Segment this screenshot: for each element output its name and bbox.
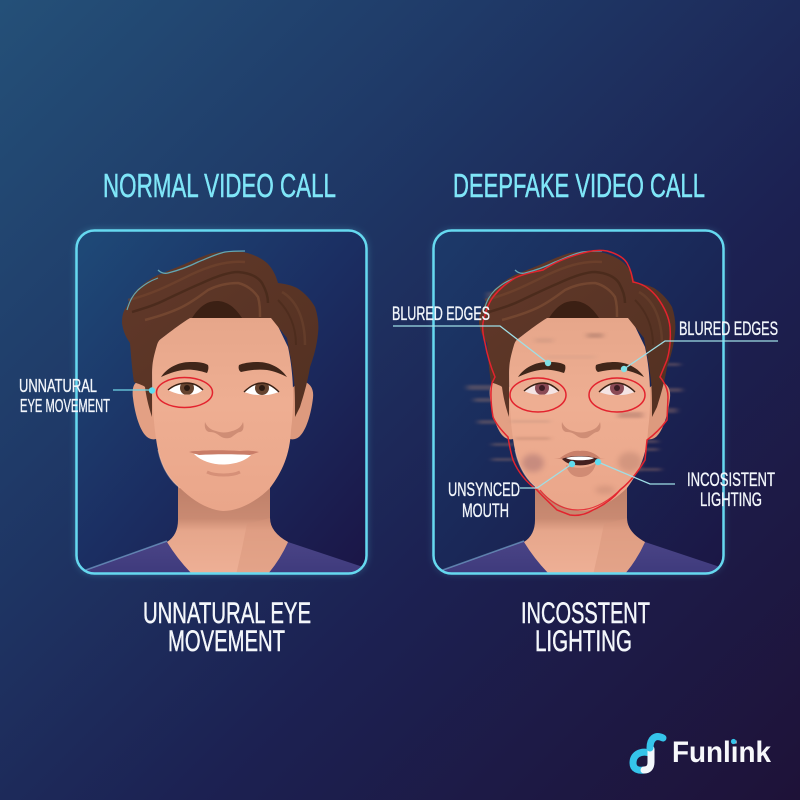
callout: unnatural eye movement: UNNATURAL [19, 376, 97, 396]
cheek and forehead glitch patches [510, 333, 643, 440]
caption: incosstent lighting [521, 597, 650, 658]
caption: unnatural eye movement [143, 597, 311, 658]
eye highlight: red ellipse [156, 378, 212, 408]
icon: cyan dot on i [731, 739, 736, 744]
callout: blured edges right [621, 319, 778, 372]
caption: incosstent lighting: LIGHTING [535, 625, 632, 658]
icon: Funlink mark [633, 737, 663, 770]
panel: normal video call [76, 230, 366, 575]
callout: inconsistent lighting [595, 459, 775, 511]
logo: Funlink [633, 736, 771, 770]
red face outline [483, 250, 670, 515]
blur ghost streaks [467, 292, 682, 471]
panel: deepfake video call [434, 230, 724, 575]
callout: unsynced mouth: MOUTH [462, 501, 509, 522]
logo: Funlink: Funlink [672, 736, 771, 769]
red chin echo line [540, 488, 622, 510]
caption: incosstent lighting: INCOSSTENT [521, 597, 650, 630]
callout: inconsistent lighting: LIGHTING [700, 490, 762, 511]
callout: unnatural eye movement [19, 376, 155, 416]
portrait: deepfake face [437, 251, 723, 575]
eye highlights: red ellipses [510, 378, 645, 412]
callout: unsynced mouth [448, 461, 575, 522]
callout: unnatural eye movement: EYE MOVEMENT [20, 396, 110, 416]
callout: unsynced mouth: UNSYNCED [448, 480, 520, 501]
callout: blured edges left [392, 304, 551, 366]
caption: unnatural eye movement: MOVEMENT [168, 625, 285, 658]
caption: unnatural eye movement: UNNATURAL EYE [143, 597, 311, 630]
portrait: normal face [80, 251, 366, 575]
callout: blured edges left: BLURED EDGES [392, 304, 490, 325]
title: normal video call: NORMAL VIDEO CALL [103, 167, 336, 204]
